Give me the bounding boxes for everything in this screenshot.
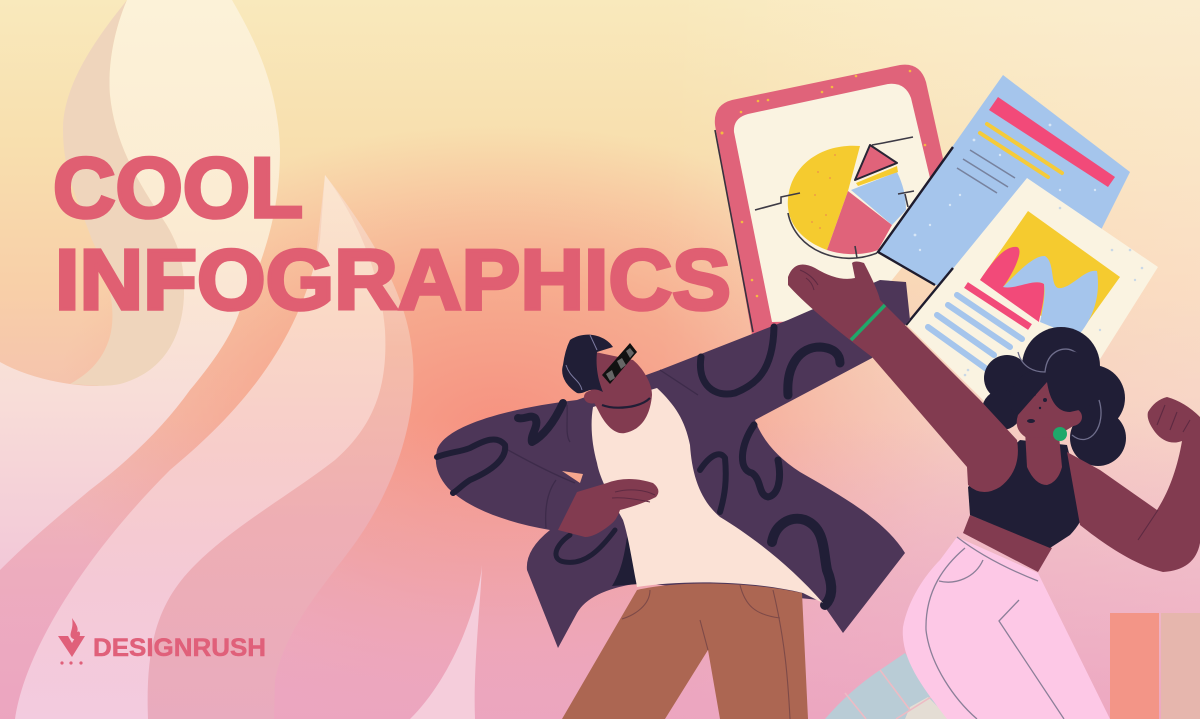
woman: pants seams	[926, 537, 1064, 719]
pie slice: detached red	[855, 145, 897, 180]
man: shirt	[592, 388, 823, 603]
icon: flame and V mark	[58, 618, 85, 665]
chart red wave	[980, 247, 1044, 322]
title line: COOL: COOL	[53, 141, 303, 236]
chart blue lines	[928, 295, 1022, 370]
woman: pants	[903, 537, 1110, 719]
man: neck and face	[590, 352, 652, 433]
man: hair	[562, 335, 613, 393]
sheet speckles	[964, 207, 1143, 376]
flame: small lower flame	[410, 565, 482, 719]
man: ear	[584, 390, 600, 404]
woman: hair highlights	[1018, 349, 1101, 440]
flame: light middle flame	[15, 175, 385, 719]
woman: ear	[1062, 408, 1082, 426]
man: gap between arm and torso	[562, 471, 583, 483]
man: pants	[562, 584, 808, 719]
man: jacket lining	[612, 520, 640, 586]
tablet screen	[734, 84, 940, 322]
sheet edge	[906, 268, 953, 325]
flame: outer tinted flame	[148, 175, 413, 719]
woman: midriff	[963, 515, 1052, 572]
man with sunglasses	[436, 280, 910, 719]
woman: hand lines	[800, 270, 818, 290]
pie slice: yellow	[788, 146, 860, 250]
woman: fist and elbow lines	[1138, 405, 1190, 540]
wordmark: DESIGNRUSH	[93, 634, 266, 662]
chart blue wave	[1003, 256, 1098, 337]
man: pants seams	[622, 585, 790, 719]
tablet speckles	[720, 70, 926, 297]
man: hair highlights	[566, 335, 597, 390]
man: finger lines	[612, 490, 655, 502]
sheet speckles	[914, 124, 1096, 251]
flame: cream upper flame with pale lower body	[0, 0, 280, 570]
title: Cool Infographics	[53, 141, 731, 328]
man: neck shadow	[602, 398, 650, 408]
title line: INFOGRAPHICS: INFOGRAPHICS	[55, 233, 731, 328]
flame: beige back flame	[63, 0, 184, 388]
man: jacket patterns	[437, 327, 840, 605]
blue report sheet	[878, 75, 1130, 290]
sheet body	[878, 75, 1130, 290]
woman: neck	[1025, 425, 1062, 485]
man: jacket	[436, 280, 910, 648]
woman: back hair	[982, 327, 1126, 466]
woman: shoe with plaid	[825, 653, 950, 719]
sheet heading bar	[989, 97, 1115, 187]
tablet with pie chart	[715, 65, 950, 340]
icon: green bracelet	[851, 305, 885, 340]
woman: crop top	[968, 440, 1083, 548]
pie chart	[755, 137, 914, 258]
yellow slice dots	[811, 154, 836, 229]
pie leader lines	[755, 137, 914, 258]
sheet grey lines	[957, 150, 1015, 193]
decorative bar: tan	[1161, 613, 1200, 719]
pie slice: yellow sliver	[856, 166, 898, 186]
woman: raised arm and hand	[788, 262, 1018, 492]
logo: DesignRush	[58, 618, 266, 665]
tablet edge line	[715, 130, 753, 332]
woman: face	[1017, 382, 1078, 438]
tablet frame	[715, 65, 950, 340]
sheet yellow lines	[980, 124, 1062, 177]
woman: front hair	[1047, 351, 1095, 412]
chart pink bar	[966, 285, 1030, 327]
cream chart sheet	[906, 178, 1158, 402]
icon: sunglasses	[602, 343, 637, 384]
decorative bar: coral	[1110, 613, 1159, 719]
man: jacket collar and cuff lines	[508, 370, 698, 528]
icon: green earring	[1053, 427, 1067, 441]
woman: eyes, freckles and mouth	[1027, 392, 1047, 423]
pie slice: red	[827, 191, 892, 254]
man: hand	[558, 479, 658, 537]
woman: left arm and fist	[1067, 397, 1200, 572]
chart background	[980, 211, 1120, 337]
pie slice: blue	[851, 172, 906, 225]
sheet body	[907, 178, 1158, 402]
woman with raised arm	[788, 262, 1200, 719]
sheet edge	[878, 147, 953, 285]
